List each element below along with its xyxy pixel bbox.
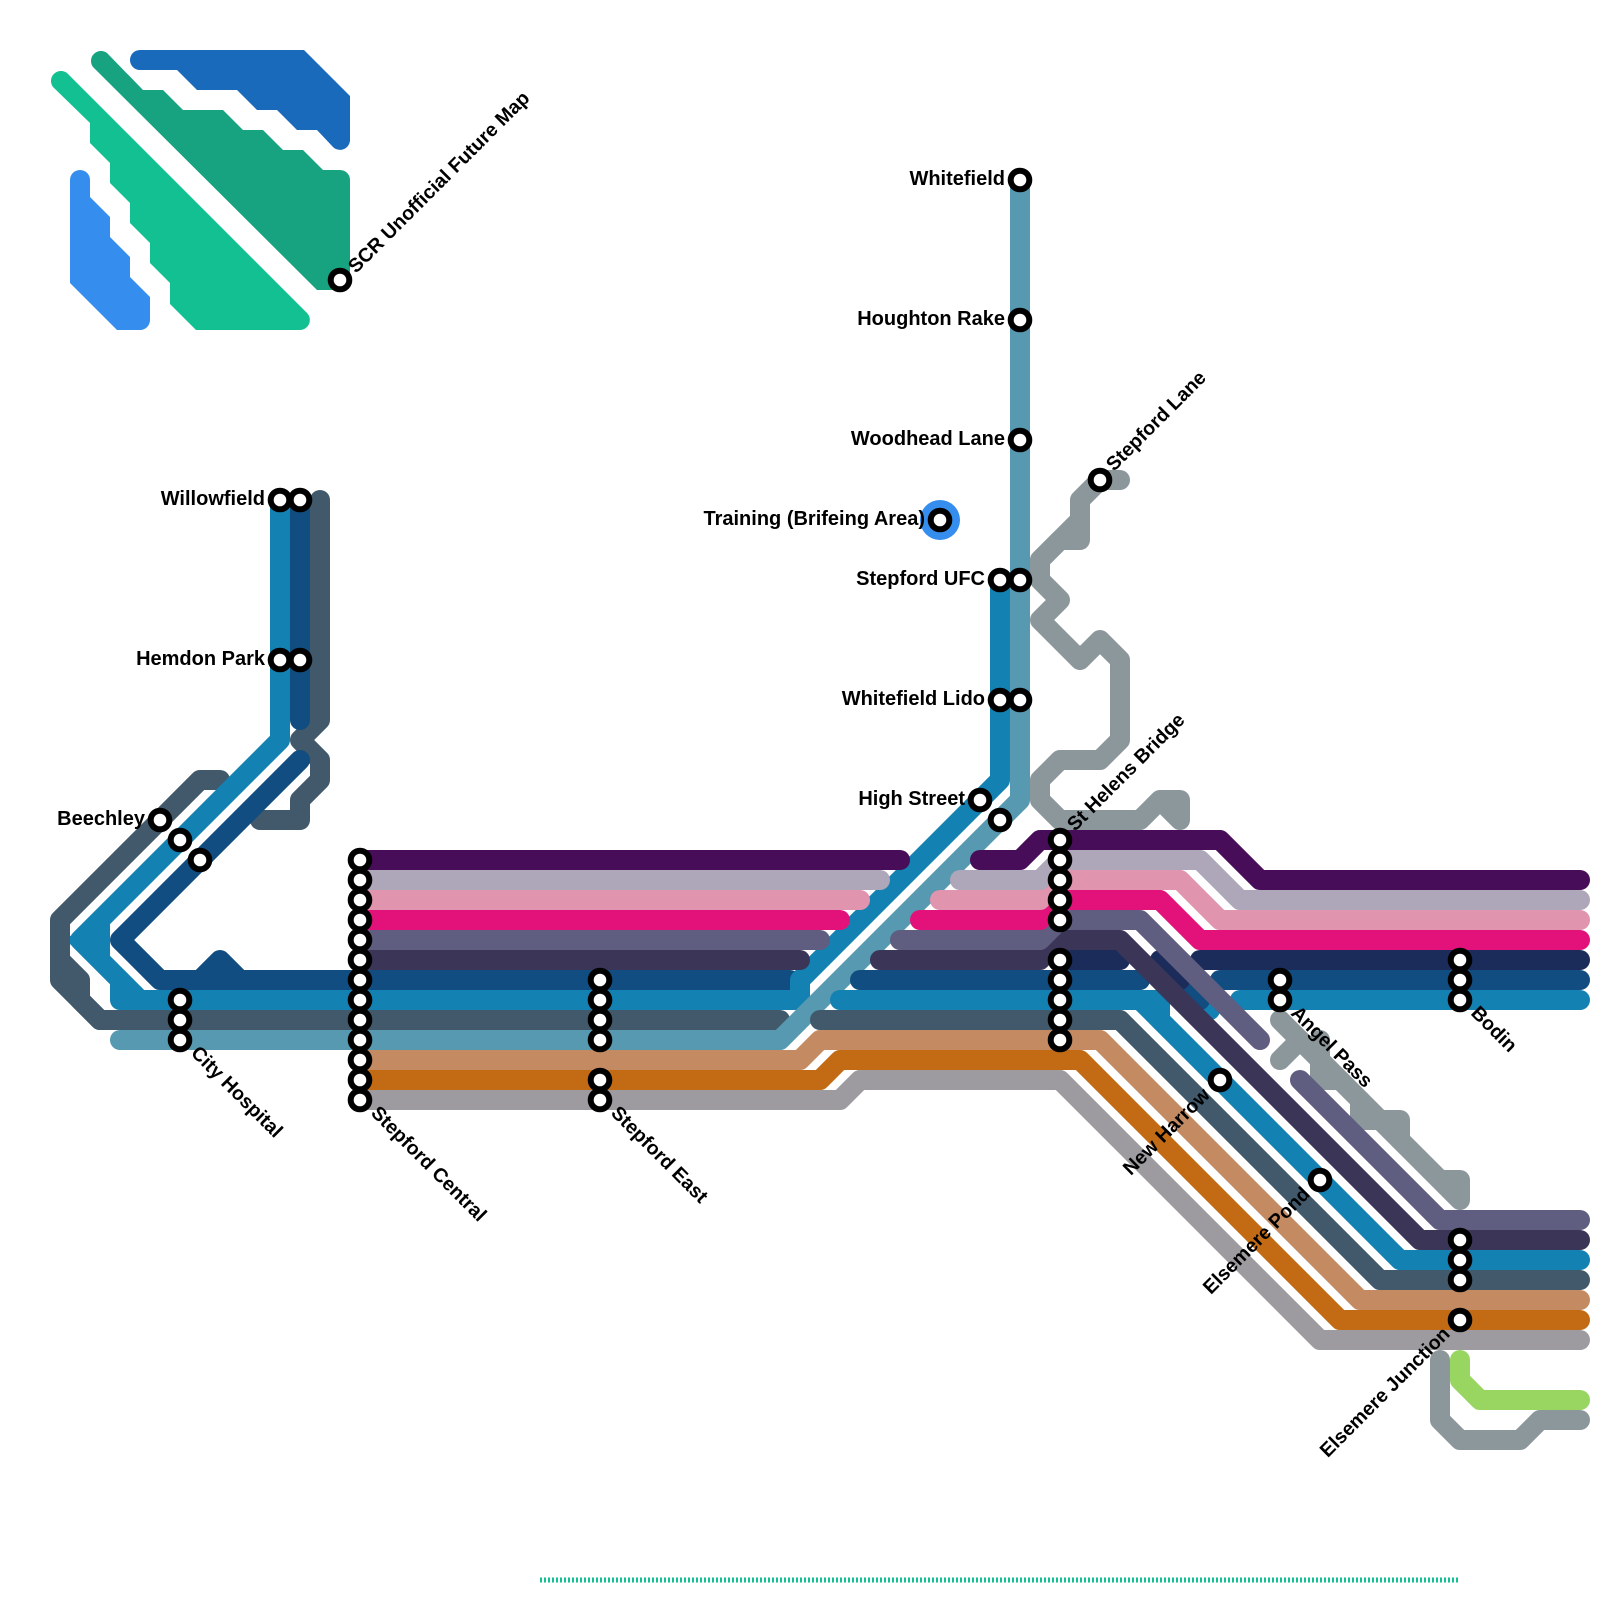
line: dark grey west branch [60,500,780,1020]
line: magenta [360,900,1580,940]
line: pink [360,880,1580,920]
logo: light blue block [70,170,150,330]
logo: bright green block [51,71,310,330]
labels: station names: Training (Brifeing Area) [703,508,925,530]
stations: all interchange markers [151,171,1469,1329]
line: orange [360,1060,1580,1320]
labels: station names: Houghton Rake [857,308,1005,330]
logo: dark blue block [130,50,350,150]
labels: station names: Hemdon Park [136,648,266,670]
line: blue west section [70,500,1000,1000]
labels: station names: Stepford UFC [856,568,985,590]
line: grey-green east branch [1280,1020,1460,1200]
labels: station names: Beechley [57,808,146,830]
labels: station names: Whitefield Lido [842,688,985,710]
labels: station names: Elsemere Pond [1199,1183,1315,1299]
line: purple [360,840,1580,880]
labels: station names: Whitefield [909,168,1005,190]
labels: station names: Bodin [1466,1002,1521,1057]
line: midnight blue [1060,960,1580,980]
labels: station names: Elsemere Junction [1316,1323,1455,1462]
line: grey [360,1080,1580,1340]
line: grey-green north branch [1040,480,1180,820]
labels: station names: Woodhead Lane [851,428,1005,450]
labels: station names: St Helens Bridge [1063,709,1189,836]
line: tan [360,1040,1580,1300]
line: lilac [360,860,1580,900]
line: navy blue west section [120,500,790,980]
icon: training area blue halo [920,500,960,540]
labels: station names: Angel Pass [1286,1002,1377,1092]
line: dark grey east [820,1020,1580,1280]
logo: four-part diagonal emblem [51,50,350,330]
logo: dark green block [91,51,350,290]
line: slate [360,920,1580,1220]
labels: station names [57,87,1521,1462]
line: navy west terminal cap [360,970,780,990]
line: grey-green south branch [1440,1360,1580,1440]
labels: station names: Stepford Lane [1102,367,1211,476]
labels: station names: SCR Unofficial Future Map [344,87,534,278]
labels: station names: Stepford Central [366,1102,491,1226]
labels: station names: High Street [858,788,965,810]
line: teal trunk [120,180,1020,1040]
labels: station names: Willowfield [161,488,265,510]
line: light green branch [1460,1360,1580,1400]
dotted rule at bottom [540,1578,1458,1582]
labels: station names: Stepford East [606,1102,712,1208]
labels: station names: City Hospital [186,1042,287,1142]
line: blue east [840,1000,1580,1260]
line: plum [360,940,1580,1240]
labels: station names: New Harrow [1119,1083,1215,1180]
line: navy blue east [860,980,1580,1000]
